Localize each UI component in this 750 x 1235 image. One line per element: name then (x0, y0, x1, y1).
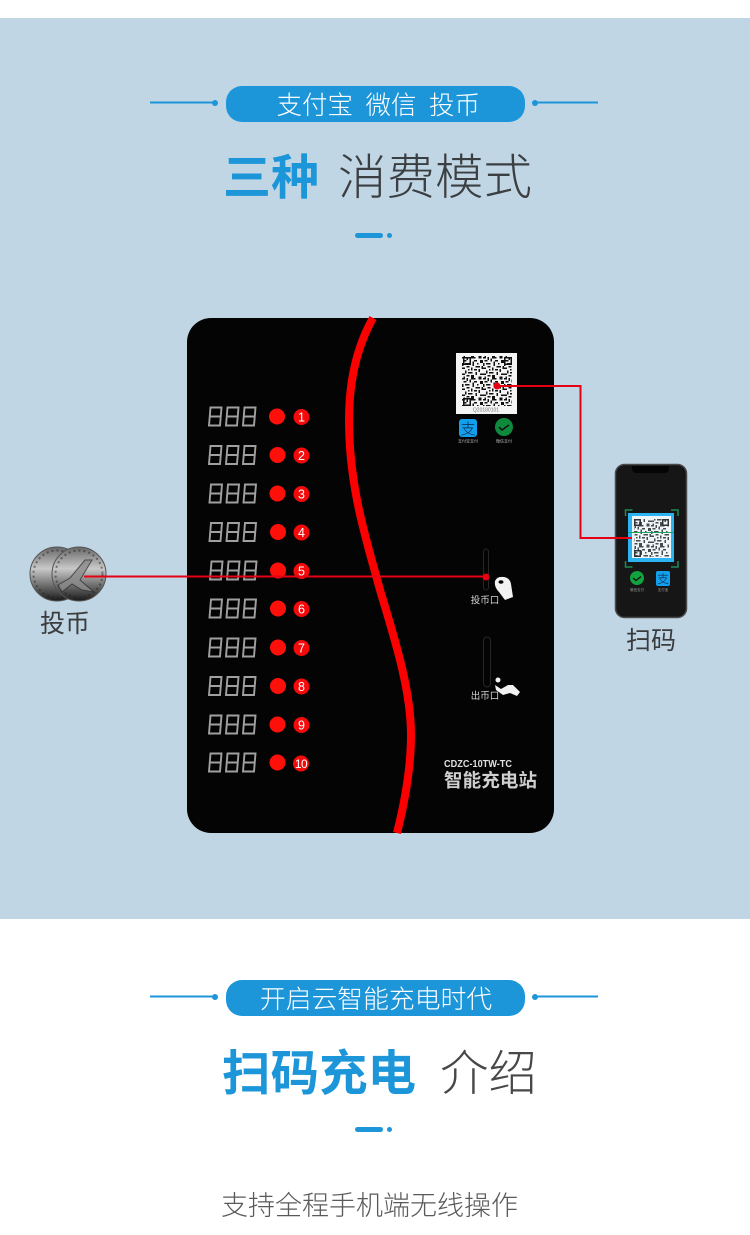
station name: 智能充电站 (444, 770, 537, 791)
icon: hand receiving coin (495, 678, 520, 696)
pill text: 支付宝 (276, 92, 353, 120)
display row 10 (209, 754, 309, 772)
left connector line (150, 996, 215, 998)
charging station device (187, 318, 554, 833)
coin return slot (484, 637, 490, 687)
display row 2: 2 (298, 449, 305, 463)
panel: blue payment modes section (0, 18, 750, 919)
device QR code (456, 353, 517, 414)
icon: Alipay on phone: 支 (657, 572, 669, 586)
display row 2 (209, 446, 310, 464)
title accent: 三种 (223, 152, 319, 205)
pill badge (226, 86, 525, 122)
icon: Alipay on device (458, 419, 478, 444)
display row 9 (209, 716, 310, 734)
icon: hand inserting coin (495, 577, 513, 600)
display row 1: 1 (298, 410, 305, 424)
section header: scan charging (150, 980, 598, 1132)
display row 8 (209, 677, 310, 695)
display row 6 (210, 600, 310, 618)
pill badge (226, 980, 525, 1016)
title underline mark (355, 233, 392, 238)
right connector line (535, 102, 598, 104)
red S curve (349, 318, 411, 833)
display row 1 (209, 408, 310, 426)
icon: WeChat Pay on phone (630, 571, 644, 592)
right connector dot (532, 994, 538, 1000)
phone label: 扫码 (626, 627, 676, 655)
device body (187, 318, 554, 833)
phone illustration (616, 464, 686, 618)
icon: WeChat Pay on device (495, 418, 513, 444)
display row 8: 8 (298, 680, 305, 694)
coin slot label: 投币口 (471, 594, 499, 606)
icon: Alipay on device: 支付宝支付 (458, 438, 478, 444)
intro text: 支持全程手机端无线操作 (221, 1191, 518, 1221)
display row 7: 7 (298, 642, 305, 656)
title remainder: 介绍 (440, 1047, 537, 1101)
title accent: 扫码充电 (222, 1047, 416, 1101)
left connector dot (212, 100, 218, 106)
device QR code: Q20180101 (473, 408, 499, 414)
coin label: 投币 (40, 610, 90, 638)
coin return label: 出币口 (471, 690, 499, 702)
title remainder: 消费模式 (338, 151, 532, 205)
pill text: 微信 (366, 92, 417, 120)
phone scan frame corners (626, 510, 678, 567)
display row 9: 9 (298, 718, 305, 732)
pill text: 开启云智能充电时代 (260, 985, 492, 1014)
icon: Alipay on device: 支 (460, 421, 476, 438)
display row 10: 10 (295, 757, 308, 771)
coin slot (484, 549, 488, 590)
phone QR code (628, 513, 674, 562)
callout line: coin to slot (84, 574, 490, 580)
left connector dot (212, 994, 218, 1000)
pill text: 投币 (429, 92, 480, 120)
display row 4 (210, 523, 310, 541)
display row 5: 5 (298, 564, 305, 578)
icon: Alipay on phone: 支付宝 (658, 587, 669, 592)
display row 4: 4 (298, 526, 305, 540)
right connector line (535, 996, 598, 998)
display row 6: 6 (298, 602, 305, 616)
icon: WeChat Pay on phone: 微信支付 (630, 587, 644, 592)
section header: payment modes (150, 86, 598, 238)
display row 3: 3 (298, 488, 305, 502)
coin illustration (30, 547, 106, 601)
icon: WeChat Pay on device: 微信支付 (496, 438, 512, 444)
display row 7 (209, 638, 310, 656)
icon: Alipay on phone (656, 571, 670, 592)
display row 3 (210, 484, 310, 502)
model number: CDZC-10TW-TC (444, 759, 512, 770)
callout line: device QR to phone (494, 382, 632, 538)
title underline mark (355, 1127, 392, 1132)
display row 5 (210, 562, 310, 580)
left connector line (150, 102, 215, 104)
right connector dot (532, 100, 538, 106)
